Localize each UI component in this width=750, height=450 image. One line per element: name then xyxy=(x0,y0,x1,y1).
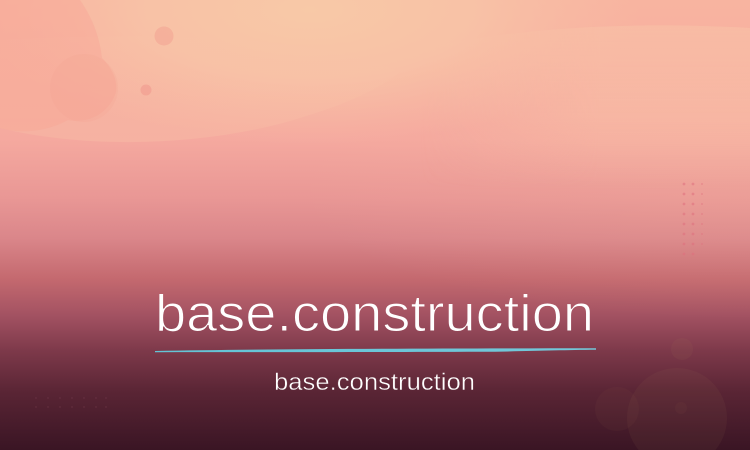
decorative blob: top left xyxy=(0,0,116,131)
decorative circles: lower right xyxy=(595,338,727,450)
title: base.construction xyxy=(155,285,594,343)
decorative dot: small xyxy=(140,84,152,96)
dot grid: right xyxy=(683,183,703,255)
decorative swoosh: upper left xyxy=(0,36,400,142)
decorative blob: inner circle xyxy=(50,54,118,122)
right side warm tint xyxy=(300,60,750,320)
decorative dot: large xyxy=(154,26,174,46)
decorative glow: top centre xyxy=(0,0,750,160)
dot grid: lower left xyxy=(35,397,107,408)
underline: cyan brush stroke xyxy=(155,348,596,352)
subtitle: base.construction xyxy=(274,369,475,396)
decorative wave: upper right xyxy=(551,26,750,137)
